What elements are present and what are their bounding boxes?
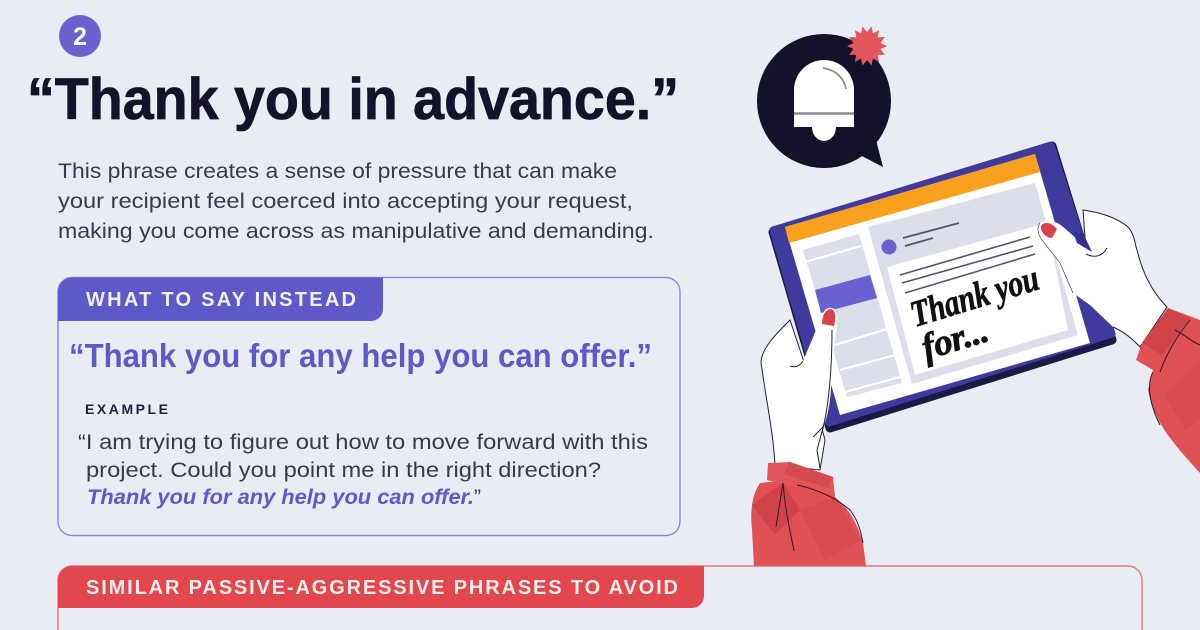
sender avatar	[882, 240, 896, 254]
example label: EXAMPLE	[85, 401, 168, 417]
panel: what to say instead	[58, 278, 680, 536]
tablet	[773, 145, 1112, 428]
panel: similar phrases to avoid	[58, 566, 1142, 630]
example text: Thank you for any help you can offer.	[87, 486, 474, 509]
tab: what to say instead	[58, 278, 383, 321]
intro paragraph: your recipient feel coerced into accepting your request,	[58, 190, 633, 213]
intro paragraph	[58, 160, 654, 243]
left hand back	[761, 320, 825, 470]
notification burst	[847, 26, 887, 66]
email body	[887, 223, 1068, 375]
right thumb	[1038, 221, 1130, 327]
handwritten text: for...	[917, 310, 994, 369]
icon: bell speech bubble	[757, 26, 891, 168]
example text	[78, 431, 648, 509]
number badge: 2	[73, 23, 87, 51]
left nail	[822, 309, 835, 326]
title: “Thank you in advance.”	[27, 67, 679, 132]
suggested phrase: “Thank you for any help you can offer.”	[69, 337, 652, 374]
handwritten text	[906, 258, 1044, 369]
example text: project. Could you point me in the right direction?	[86, 459, 601, 482]
screen	[785, 154, 1090, 415]
illustration: hands holding tablet	[751, 145, 1200, 566]
right nail	[1041, 223, 1057, 238]
number badge	[59, 15, 101, 57]
orange header	[785, 154, 1040, 243]
email panel	[868, 183, 1078, 384]
right sleeve	[1136, 308, 1200, 473]
tab label: SIMILAR PASSIVE-AGGRESSIVE PHRASES TO AVOID	[86, 577, 678, 599]
left thumb	[790, 308, 837, 468]
intro paragraph: This phrase creates a sense of pressure that can make	[58, 160, 617, 183]
right hand back	[1083, 210, 1167, 347]
handwritten text: Thank you	[906, 258, 1044, 336]
tab label: WHAT TO SAY INSTEAD	[86, 289, 356, 311]
intro paragraph: making you come across as manipulative and demanding.	[58, 220, 654, 243]
left sleeve	[751, 462, 866, 566]
thumb shadow	[1073, 232, 1092, 252]
sidebar	[803, 234, 902, 397]
bell	[794, 60, 854, 141]
example text: “I am trying to figure out how to move forward with this	[78, 431, 648, 454]
example text: ”	[474, 486, 481, 509]
tab: similar phrases	[58, 566, 704, 608]
